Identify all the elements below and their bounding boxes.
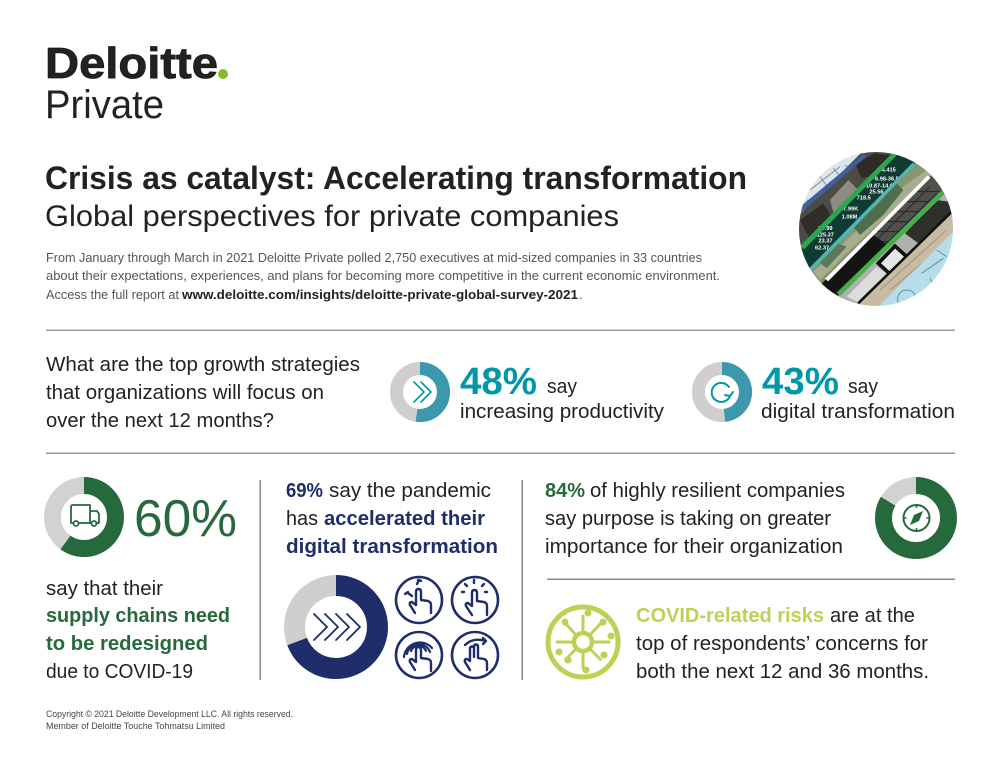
panel: COVID risks <box>548 604 929 683</box>
question: growth strategies: that organizations will focus on <box>46 381 324 404</box>
icon: tap gesture <box>452 577 498 623</box>
pandemic text: 69% <box>286 479 323 502</box>
donut chart: 84% with compass <box>884 486 948 550</box>
supply chain text: say that their <box>46 577 163 600</box>
intro paragraph: From January through March in 2021 Deloitte Private polled 2,750 executives at mid-sized companies in 33 countries <box>46 250 702 265</box>
supply chain text: to be redesigned <box>46 632 208 655</box>
stat: 43% digital transformation: digital transformation <box>761 400 955 423</box>
divider middle <box>46 452 955 454</box>
collage photo circle: 718.5 <box>857 195 871 201</box>
icon: pinch gesture <box>396 577 442 623</box>
title: Crisis as catalyst: Accelerating transformation <box>45 160 747 196</box>
intro paragraph: about their expectations, experiences, and plans for becoming more competitive in the current economic environment. <box>46 268 720 283</box>
logo: Deloitte Private: Deloitte <box>45 40 218 88</box>
COVID text: COVID-related risks <box>636 604 824 627</box>
stat: 43% digital transformation <box>761 361 955 423</box>
stat: 60%: 60% <box>134 490 237 548</box>
supply chain text <box>46 577 230 683</box>
COVID text: are at the <box>830 604 915 627</box>
pandemic text: say the pandemic <box>329 479 491 502</box>
collage photo circle: 50.99 <box>818 226 832 232</box>
pandemic text: digital transformation <box>286 535 498 558</box>
divider top <box>46 330 955 331</box>
supply chain text: supply chains need <box>46 604 230 627</box>
donut chart: 60% with truck <box>52 486 116 548</box>
donut chart: 48% productivity <box>396 368 444 416</box>
donut chart: 69% with chevrons <box>294 586 378 668</box>
collage photo circle: 25.56 <box>869 189 883 195</box>
collage photo circle: 23.37 <box>818 239 832 245</box>
donut chart: 43% digital transformation <box>698 368 746 416</box>
panel: purpose <box>545 479 948 558</box>
panel: digital transformation <box>286 479 498 678</box>
icon: virus <box>548 607 618 677</box>
footer copyright: Member of Deloitte Touche Tohmatsu Limited <box>46 721 225 731</box>
stat: 48% increasing productivity: 48% <box>460 361 537 403</box>
icon: swipe gesture <box>452 632 498 678</box>
intro paragraph: www.deloitte.com/insights/deloitte-private-global-survey-2021 <box>181 287 578 302</box>
collage photo circle: 125.37 <box>817 233 834 239</box>
collage photo circle: 37.99K <box>840 207 859 213</box>
pandemic text: has <box>286 507 318 530</box>
COVID text: top of respondents’ concerns for <box>636 632 928 655</box>
question: growth strategies: What are the top growth strategies <box>46 353 360 376</box>
icon: fingerprint touch gesture <box>396 632 442 678</box>
pandemic text: accelerated their <box>324 507 485 530</box>
purpose text <box>545 479 845 558</box>
collage photo circle: 10.87-14.04 <box>866 183 897 189</box>
COVID text: both the next 12 and 36 months. <box>636 660 929 683</box>
panel: supply chains <box>46 486 237 683</box>
intro paragraph: . <box>579 287 583 302</box>
collage photo circle: 1.08M <box>842 214 858 220</box>
purpose text: importance for their organization <box>545 535 843 558</box>
vertical divider right <box>522 480 523 680</box>
pandemic text <box>286 479 498 558</box>
footer copyright: Copyright © 2021 Deloitte Development LLC. All rights reserved. <box>46 709 293 719</box>
intro paragraph <box>46 250 720 302</box>
logo: Deloitte Private: Private <box>45 83 164 127</box>
footer copyright <box>46 709 293 731</box>
purpose text: of highly resilient companies <box>590 479 845 502</box>
collage photo circle <box>799 152 953 306</box>
supply chain text: due to COVID-19 <box>46 660 193 683</box>
collage photo circle: 4.415 <box>882 168 896 174</box>
stat: 48% increasing productivity: increasing productivity <box>460 400 665 423</box>
collage photo circle: 62.37 <box>815 245 829 251</box>
collage photo circle: 6.98-36.5 <box>875 177 899 183</box>
stat: 43% digital transformation: say <box>848 375 879 398</box>
intro paragraph: Access the full report at <box>46 287 179 302</box>
subtitle: Global perspectives for private companies <box>45 200 619 233</box>
logo: Deloitte Private <box>45 40 228 127</box>
vertical divider left <box>260 480 261 680</box>
question: growth strategies: over the next 12 months? <box>46 409 274 432</box>
question: growth strategies <box>46 353 360 432</box>
purpose text: 84% <box>545 479 585 502</box>
stat: 48% increasing productivity: say <box>547 375 578 398</box>
purpose text: say purpose is taking on greater <box>545 507 831 530</box>
divider right panel <box>547 578 955 580</box>
stat: 43% digital transformation: 43% <box>762 361 839 403</box>
COVID text <box>636 604 929 683</box>
stat: 48% increasing productivity <box>460 361 665 423</box>
